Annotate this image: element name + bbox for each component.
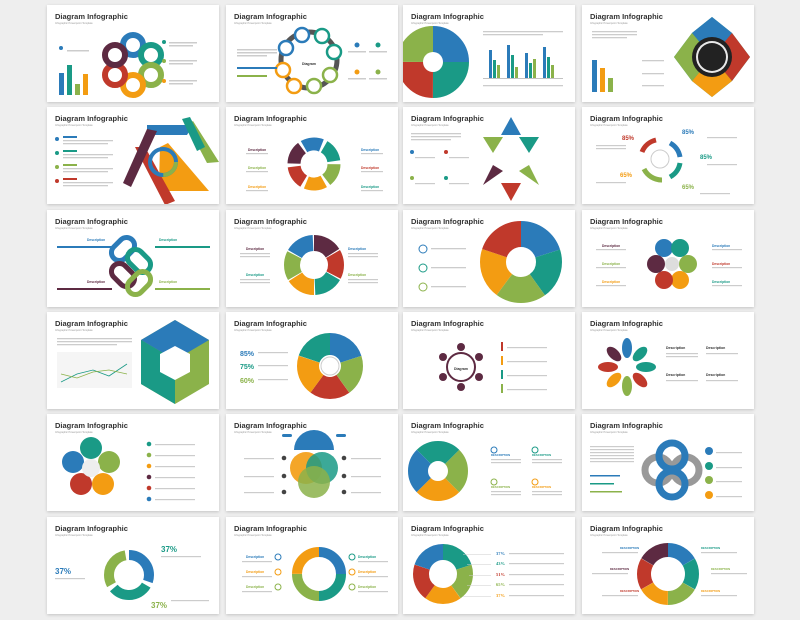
slide 14: donut with percentages: 85% [240,351,255,358]
slide 6: ring of arrow segments: Description [248,148,266,152]
slide 19: swirl with descriptions: Infographic Powerpoint Template [411,431,449,434]
slide 5: triangular arrows [47,107,219,204]
slide 23: donut with percentage list: 43% [496,561,506,566]
slide 20: infinity loops with sliders: Infographic Powerpoint Template [590,431,628,434]
slide 19: swirl with descriptions: Diagram Infographic [411,421,484,430]
slide 2: hexagon ring: Infographic Powerpoint Template [234,22,272,25]
slide 22: donut with descriptions: Description [246,555,264,559]
slide 2: hexagon ring [226,5,398,102]
slide 24: six-segment donut with descriptions: DESCRIPTION [610,567,629,571]
slide 6: ring of arrow segments: Description [361,148,379,152]
slide 21: arrow ring with 37%: Diagram Infographic [55,524,128,533]
slide 21: arrow ring with 37% [47,517,219,614]
slide 8: percentage arrows cycle [582,107,754,204]
slide 7: star of triangles: Infographic Powerpoint Template [411,124,449,127]
slide 6: ring of arrow segments: Description [361,166,379,170]
slide 24: six-segment donut with descriptions: DESCRIPTION [711,567,730,571]
slide 9: chain links: Description [159,280,177,284]
slide 3: pie with bar chart: Infographic Powerpoint Template [411,22,449,25]
slide 6: ring of arrow segments: Infographic Powerpoint Template [234,124,272,127]
slide 18: venn with bulb [226,414,398,511]
slide 24: six-segment donut with descriptions: DESCRIPTION [701,546,720,550]
slide 14: donut with percentages [226,312,398,409]
slide 23: donut with percentage list [403,517,575,614]
slide 11: pinwheel circle [403,210,575,307]
slide 9: chain links: Description [159,238,177,242]
slide 23: donut with percentage list: Diagram Infographic [411,524,484,533]
slide 24: six-segment donut with descriptions: Diagram Infographic [590,524,663,533]
slide 6: ring of arrow segments: Description [361,185,379,189]
slide 22: donut with descriptions: Infographic Powerpoint Template [234,534,272,537]
slide 18: venn with bulb: Diagram Infographic [234,421,307,430]
slide 23: donut with percentage list: 51% [496,572,506,577]
slide 12: hexagon flower [582,210,754,307]
slide 19: swirl with descriptions: DESCRIPTION [532,453,551,457]
slide 10: segmented donut: Diagram Infographic [234,217,307,226]
slide 16: petal flower with descriptions: Description [706,346,725,350]
slide 17: circle flower list [47,414,219,511]
slide 15: gear diagram with list [403,312,575,409]
slide 13: line chart and hexagon [47,312,219,409]
slide 7: star of triangles: Diagram Infographic [411,114,484,123]
slide 12: hexagon flower: Description [602,262,620,266]
slide 1: ring of six circles with bars: Infographic Powerpoint Template [55,22,93,25]
slide 23: donut with percentage list: 65% [496,582,506,587]
slide 3: pie with bar chart: Diagram Infographic [411,12,484,21]
slide 22: donut with descriptions [226,517,398,614]
slide 22: donut with descriptions: Diagram Infographic [234,524,307,533]
slide 16: petal flower with descriptions: Diagram Infographic [590,319,663,328]
slide 6: ring of arrow segments: Diagram Infographic [234,114,307,123]
slide 12: hexagon flower: Infographic Powerpoint Template [590,227,628,230]
slide 24: six-segment donut with descriptions [582,517,754,614]
slide 19: swirl with descriptions [403,414,575,511]
slide 17: circle flower list: Infographic Powerpoint Template [55,431,93,434]
slide 14: donut with percentages: Infographic Powerpoint Template [234,329,272,332]
slide 5: triangular arrows: Diagram Infographic [55,114,128,123]
slide 22: donut with descriptions: Description [246,585,264,589]
slide 7: star of triangles [403,107,575,204]
slide 18: venn with bulb: Infographic Powerpoint Template [234,431,272,434]
slide 8: percentage arrows cycle: 65% [682,185,695,191]
slide 10: segmented donut: Description [246,247,264,251]
slide 14: donut with percentages: 75% [240,364,255,371]
slide 20: infinity loops with sliders [582,414,754,511]
slide 8: percentage arrows cycle: 85% [682,130,695,136]
slide 22: donut with descriptions: Description [358,570,376,574]
slide 12: hexagon flower: Description [602,244,620,248]
slide 10: segmented donut [226,210,398,307]
slide 13: line chart and hexagon: Diagram Infographic [55,319,128,328]
slide 9: chain links: Infographic Powerpoint Template [55,227,93,230]
slide 10: segmented donut: Description [348,273,366,277]
slide 20: infinity loops with sliders: Diagram Infographic [590,421,663,430]
slide 10: segmented donut: Infographic Powerpoint Template [234,227,272,230]
slide 4: hexagram with globe: Diagram Infographic [590,12,663,21]
slide 14: donut with percentages: 60% [240,378,255,385]
slide 16: petal flower with descriptions [582,312,754,409]
slide 21: arrow ring with 37%: 37% [55,567,71,576]
slide 19: swirl with descriptions: DESCRIPTION [532,485,551,489]
slide 16: petal flower with descriptions: Description [706,373,725,377]
slide 22: donut with descriptions: Description [358,585,376,589]
slide 6: ring of arrow segments [226,107,398,204]
slide 15: gear diagram with list: Diagram [454,367,468,371]
slide 22: donut with descriptions: Description [358,555,376,559]
slide 13: line chart and hexagon: Infographic Powerpoint Template [55,329,93,332]
slide 21: arrow ring with 37%: Infographic Powerpoint Template [55,534,93,537]
slide 21: arrow ring with 37%: 37% [151,601,167,610]
slide 9: chain links: Description [87,280,105,284]
slide 4: hexagram with globe: Infographic Powerpoint Template [590,22,628,25]
slide 8: percentage arrows cycle: Infographic Powerpoint Template [590,124,628,127]
slide 12: hexagon flower: Description [712,262,730,266]
slide 23: donut with percentage list: 37% [496,593,506,598]
slide 8: percentage arrows cycle: 85% [622,136,635,142]
slide 16: petal flower with descriptions: Infographic Powerpoint Template [590,329,628,332]
slide 10: segmented donut: Description [246,273,264,277]
slide 16: petal flower with descriptions: Description [666,346,685,350]
slide 1: ring of six circles with bars: Diagram Infographic [55,12,128,21]
slide 8: percentage arrows cycle: Diagram Infographic [590,114,663,123]
slide 8: percentage arrows cycle: 85% [700,155,713,161]
slide 15: gear diagram with list: Infographic Powerpoint Template [411,329,449,332]
slide 4: hexagram with globe [582,5,754,102]
slide 9: chain links [47,210,219,307]
slide 22: donut with descriptions: Description [246,570,264,574]
slide 19: swirl with descriptions: DESCRIPTION [491,453,510,457]
slide 2: hexagon ring: Diagram [302,62,316,66]
slide 6: ring of arrow segments: Description [248,185,266,189]
slide 11: pinwheel circle: Diagram Infographic [411,217,484,226]
slide 12: hexagon flower: Description [602,280,620,284]
slide 12: hexagon flower: Description [712,280,730,284]
slide 12: hexagon flower: Diagram Infographic [590,217,663,226]
slide 3: pie with bar chart [403,5,575,102]
slide 24: six-segment donut with descriptions: Infographic Powerpoint Template [590,534,628,537]
slide 9: chain links: Description [87,238,105,242]
slide 2: hexagon ring: Diagram Infographic [234,12,307,21]
slide 15: gear diagram with list: Diagram Infographic [411,319,484,328]
slide 9: chain links: Diagram Infographic [55,217,128,226]
slide 10: segmented donut: Description [348,247,366,251]
slide 8: percentage arrows cycle: 65% [620,173,633,179]
slide 24: six-segment donut with descriptions: DESCRIPTION [701,589,720,593]
slide 12: hexagon flower: Description [712,244,730,248]
slide 6: ring of arrow segments: Description [248,166,266,170]
slide 16: petal flower with descriptions: Description [666,373,685,377]
slide 24: six-segment donut with descriptions: DESCRIPTION [620,546,639,550]
slide 11: pinwheel circle: Infographic Powerpoint Template [411,227,449,230]
slide 21: arrow ring with 37%: 37% [161,545,177,554]
slide 23: donut with percentage list: Infographic Powerpoint Template [411,534,449,537]
slide 5: triangular arrows: Infographic Powerpoint Template [55,124,93,127]
slide 19: swirl with descriptions: DESCRIPTION [491,485,510,489]
slide 24: six-segment donut with descriptions: DESCRIPTION [620,589,639,593]
slide 14: donut with percentages: Diagram Infographic [234,319,307,328]
slide 17: circle flower list: Diagram Infographic [55,421,128,430]
slide 1: ring of six circles with bars [47,5,219,102]
slide 23: donut with percentage list: 37% [496,551,506,556]
